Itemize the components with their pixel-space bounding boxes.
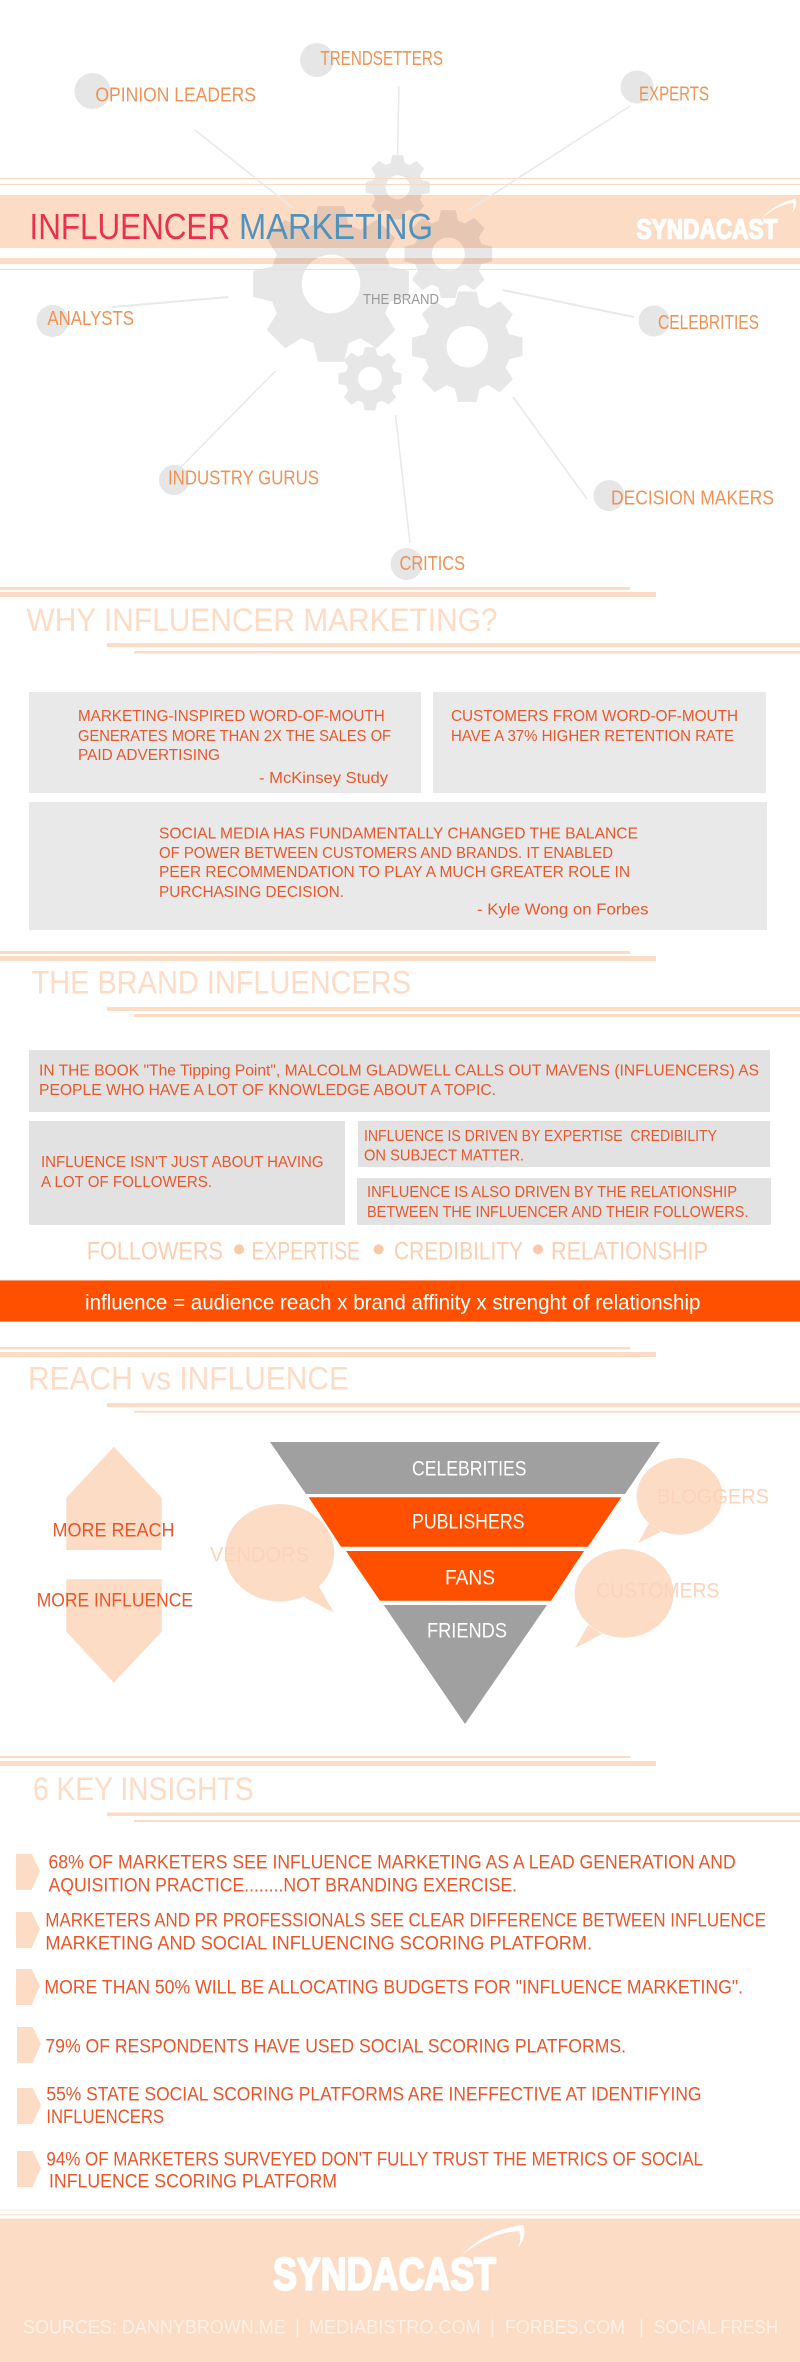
heading: 6 key insights: 6 KEY INSIGHTS	[33, 1771, 254, 1807]
heading: reach vs influence: REACH vs INFLUENCE	[28, 1360, 349, 1396]
bubble: customers	[574, 1549, 719, 1648]
logo: syndacast header	[636, 199, 796, 244]
influencer: trendsetters: TRENDSETTERS	[320, 48, 443, 70]
insight 6: 94% OF MARKETERS SURVEYED DON'T FULLY TRUST THE METRICS OF SOCIAL	[46, 2149, 703, 2170]
key factors row: FOLLOWERS	[87, 1238, 223, 1266]
insight 6: INFLUENCE SCORING PLATFORM	[49, 2172, 337, 2192]
brand label: THE BRAND	[363, 292, 439, 308]
panel: kyle wong quote: PURCHASING DECISION.	[159, 884, 344, 901]
funnel tier: publishers: PUBLISHERS	[412, 1511, 524, 1534]
insight 3	[16, 1969, 743, 2005]
arrow: more influence: MORE INFLUENCE	[37, 1591, 193, 1612]
funnel tier: friends: FRIENDS	[427, 1620, 507, 1643]
key factors row	[87, 1238, 708, 1266]
sources: FORBES.COM	[505, 2318, 625, 2338]
insight 5: 55% STATE SOCIAL SCORING PLATFORMS ARE INEFFECTIVE AT IDENTIFYING	[46, 2084, 701, 2106]
panel: kyle wong quote: SOCIAL MEDIA HAS FUNDAMENTALLY CHANGED THE BALANCE	[159, 825, 638, 842]
influencer: industry gurus	[159, 465, 319, 495]
panel: relationship: INFLUENCE IS ALSO DRIVEN BY THE RELATIONSHIP	[367, 1184, 737, 1201]
heading: the brand influencers: THE BRAND INFLUENCERS	[32, 964, 411, 1000]
section: why influencer marketing	[0, 587, 800, 930]
sources: |	[639, 2318, 644, 2338]
panel: kyle wong quote: - Kyle Wong on Forbes	[477, 902, 648, 918]
bubble: bloggers: BLOGGERS	[657, 1485, 769, 1508]
heading: why influencer marketing	[0, 587, 800, 654]
panel: followers	[29, 1121, 345, 1225]
influencer: analysts	[36, 305, 134, 337]
panel: mckinsey quote: - McKinsey Study	[259, 770, 388, 787]
title	[30, 206, 433, 247]
panel: retention rate	[433, 692, 766, 793]
insight 5: INFLUENCERS	[46, 2107, 164, 2128]
panel: kyle wong quote: PEER RECOMMENDATION TO PLAY A MUCH GREATER ROLE IN	[159, 864, 630, 881]
funnel tier: publishers	[309, 1497, 621, 1547]
panel: expertise credibility	[358, 1121, 770, 1167]
bubble: customers: CUSTOMERS	[596, 1579, 719, 1602]
chart: influence funnel	[270, 1442, 660, 1724]
panel: mckinsey quote: GENERATES MORE THAN 2X THE SALES OF	[78, 728, 391, 745]
bubble: bloggers	[637, 1458, 769, 1543]
panel: followers: INFLUENCE ISN'T JUST ABOUT HAVING	[41, 1154, 324, 1171]
insight 3: MORE THAN 50% WILL BE ALLOCATING BUDGETS FOR "INFLUENCE MARKETING".	[44, 1978, 743, 1999]
title: INFLUENCER	[30, 206, 230, 247]
funnel tier: fans: FANS	[445, 1567, 495, 1590]
insight 6	[17, 2149, 703, 2192]
influencer: celebrities: CELEBRITIES	[658, 312, 759, 334]
panel: kyle wong quote	[29, 802, 767, 930]
panel: relationship: BETWEEN THE INFLUENCER AND THEIR FOLLOWERS.	[367, 1204, 748, 1221]
insight 4: 79% OF RESPONDENTS HAVE USED SOCIAL SCORING PLATFORMS.	[45, 2036, 626, 2058]
panel: tipping point	[29, 1050, 770, 1112]
logo: syndacast footer: SYNDACAST	[273, 2248, 496, 2300]
panel: followers: A LOT OF FOLLOWERS.	[41, 1174, 212, 1191]
formula bar	[0, 1280, 800, 1322]
panel: retention rate: HAVE A 37% HIGHER RETENTION RATE	[451, 728, 734, 745]
panel: kyle wong quote: OF POWER BETWEEN CUSTOMERS AND BRANDS. IT ENABLED	[159, 845, 613, 862]
insight 4	[17, 2027, 626, 2063]
spokes	[112, 86, 634, 543]
section: 6 key insights	[0, 1756, 800, 2192]
arrow: more reach: MORE REACH	[52, 1521, 174, 1542]
panel: relationship	[357, 1178, 771, 1225]
heading: 6 key insights	[0, 1756, 800, 1822]
sources: SOCIAL FRESH	[654, 2318, 778, 2338]
panel: retention rate: CUSTOMERS FROM WORD-OF-MOUTH	[451, 708, 738, 725]
influencer: experts	[620, 70, 709, 105]
insight 1: AQUISITION PRACTICE........NOT BRANDING EXERCISE.	[48, 1875, 517, 1896]
formula bar: influence = audience reach x brand affinity x strenght of relationship	[85, 1292, 700, 1314]
header band	[0, 195, 800, 264]
influencer: opinion leaders	[74, 73, 256, 109]
panel: mckinsey quote: PAID ADVERTISING	[78, 747, 220, 764]
heading: why influencer marketing: WHY INFLUENCER MARKETING?	[26, 602, 498, 638]
insight 2	[16, 1910, 766, 1954]
bubble: vendors: VENDORS	[210, 1544, 309, 1567]
insight 2: MARKETING AND SOCIAL INFLUENCING SCORING PLATFORM.	[45, 1934, 592, 1954]
arrow: more influence	[37, 1579, 193, 1683]
insight 1	[16, 1852, 736, 1896]
panel: tipping point: PEOPLE WHO HAVE A LOT OF KNOWLEDGE ABOUT A TOPIC.	[39, 1082, 496, 1099]
influencer: opinion leaders: OPINION LEADERS	[95, 84, 256, 106]
sources: SOURCES: DANNYBROWN.ME	[23, 2318, 286, 2338]
influencer: decision makers: DECISION MAKERS	[611, 487, 774, 509]
panel: tipping point: IN THE BOOK "The Tipping Point", MALCOLM GLADWELL CALLS OUT MAVENS (INFLUENCERS) AS	[39, 1062, 759, 1079]
title: MARKETING	[239, 206, 433, 247]
key factors row: RELATIONSHIP	[551, 1238, 708, 1266]
sources: |	[295, 2318, 300, 2338]
influencer: celebrities	[638, 306, 759, 336]
funnel tier: fans	[346, 1551, 584, 1601]
header rules	[0, 178, 800, 270]
section: the brand influencers	[0, 951, 800, 1322]
funnel tier: celebrities	[270, 1442, 660, 1494]
panel: mckinsey quote	[29, 692, 421, 793]
heading: reach vs influence	[0, 1347, 800, 1413]
section: reach vs influence	[0, 1347, 800, 1724]
influencer: decision makers	[594, 480, 774, 511]
influencer: critics: CRITICS	[400, 553, 465, 575]
sources	[23, 2318, 778, 2338]
footer	[0, 2209, 800, 2362]
logo: syndacast footer	[273, 2225, 525, 2300]
insight 5	[17, 2084, 702, 2128]
icon: brand gears	[253, 155, 523, 410]
influencer: trendsetters	[300, 43, 443, 77]
influencer: experts: EXPERTS	[639, 83, 709, 105]
arrow: more reach	[52, 1447, 174, 1550]
influencer: critics	[391, 548, 465, 580]
funnel tier: friends	[384, 1605, 547, 1724]
panel: expertise credibility: ON SUBJECT MATTER.	[364, 1148, 524, 1165]
sources: |	[490, 2318, 495, 2338]
sources: MEDIABISTRO.COM	[309, 2318, 481, 2338]
panel: expertise credibility: INFLUENCE IS DRIVEN BY EXPERTISE CREDIBILITY	[364, 1128, 717, 1145]
bubble: vendors	[210, 1504, 334, 1613]
panel: mckinsey quote: MARKETING-INSPIRED WORD-OF-MOUTH	[78, 708, 385, 725]
influencer: analysts: ANALYSTS	[47, 308, 134, 330]
key factors row: CREDIBILITY	[394, 1238, 523, 1266]
heading: the brand influencers	[0, 951, 800, 1017]
insight 1: 68% OF MARKETERS SEE INFLUENCE MARKETING AS A LEAD GENERATION AND	[48, 1852, 736, 1873]
funnel tier: celebrities: CELEBRITIES	[412, 1458, 526, 1481]
key factors row: EXPERTISE	[252, 1238, 360, 1266]
influencer: industry gurus: INDUSTRY GURUS	[168, 468, 319, 490]
